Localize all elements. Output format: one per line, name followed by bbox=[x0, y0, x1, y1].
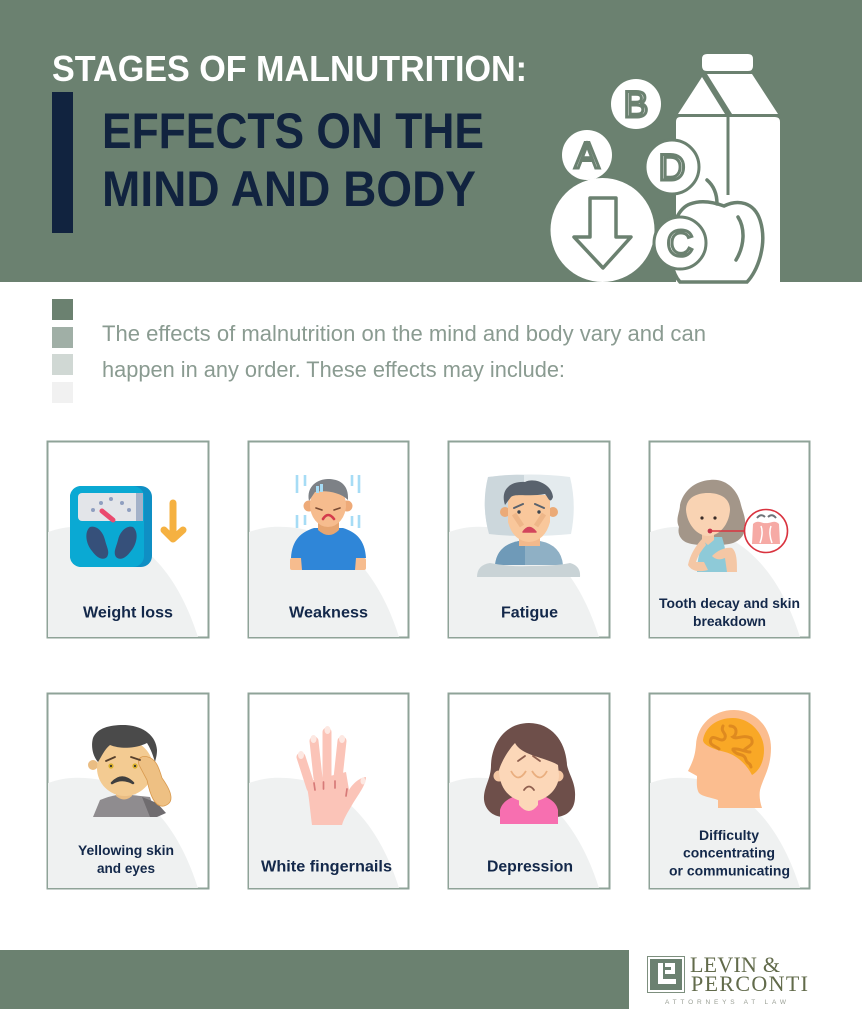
logo: Levin & Perconti bbox=[648, 952, 808, 1006]
icon: scale bbox=[70, 486, 152, 567]
vitamin B bbox=[611, 79, 661, 129]
label: concentrating bbox=[683, 844, 775, 860]
icon: head with brain bbox=[688, 710, 771, 808]
logo tagline: ATTORNEYS AT LAW bbox=[665, 999, 787, 1006]
icon: nutrition group with carton, vitamins, apple and down arrow bbox=[550, 54, 780, 282]
label: Weight loss bbox=[83, 604, 173, 622]
label: White fingernails bbox=[261, 858, 392, 876]
vitamin A bbox=[562, 130, 612, 180]
panel: fatigue bbox=[448, 442, 610, 638]
panel: weakness bbox=[248, 442, 408, 638]
label: Yellowing skin bbox=[78, 842, 174, 858]
icon: sad woman bbox=[484, 723, 575, 824]
heading: MIND AND BODY bbox=[102, 161, 476, 217]
icon: hand bbox=[298, 726, 366, 825]
heading: EFFECTS ON THE bbox=[102, 103, 484, 159]
header banner bbox=[0, 0, 862, 282]
heading bbox=[102, 103, 484, 217]
vitamin D: D bbox=[659, 147, 685, 188]
intro text: happen in any order. These effects may include: bbox=[102, 357, 565, 382]
footer bar bbox=[0, 950, 629, 1009]
vitamin C bbox=[654, 217, 706, 269]
vitamin C: C bbox=[667, 223, 693, 264]
icon: man with yellow eyes bbox=[88, 725, 171, 817]
intro text: The effects of malnutrition on the mind and body vary and can bbox=[102, 321, 706, 346]
logo wordmark: LEVIN & bbox=[690, 952, 780, 977]
label bbox=[669, 827, 790, 878]
icon: down arrow bbox=[164, 503, 183, 539]
icon: woman with tooth callout bbox=[677, 480, 788, 572]
logo wordmark bbox=[690, 952, 808, 996]
icon: down arrow in circle bbox=[550, 178, 654, 282]
panel: white fingernails bbox=[248, 694, 408, 888]
color swatches bbox=[52, 299, 73, 403]
icon: weak person bbox=[290, 475, 366, 570]
label: and eyes bbox=[97, 860, 155, 876]
panel: tooth decay and skin breakdown bbox=[650, 442, 810, 638]
title: STAGES OF MALNUTRITION: bbox=[52, 48, 527, 89]
label: Weakness bbox=[289, 604, 368, 622]
intro text bbox=[102, 321, 706, 382]
label bbox=[78, 842, 174, 876]
panel: weight loss bbox=[48, 442, 208, 638]
icon: tired person in bed bbox=[477, 474, 580, 577]
heading accent bar bbox=[52, 92, 73, 233]
label: Tooth decay and skin bbox=[659, 595, 800, 611]
label: breakdown bbox=[693, 613, 766, 629]
label: Fatigue bbox=[501, 604, 558, 622]
label: Depression bbox=[487, 858, 573, 876]
logo mark bbox=[648, 956, 684, 992]
panel: depression bbox=[448, 694, 610, 888]
logo wordmark: PERCONTI bbox=[691, 971, 808, 996]
vitamin A: A bbox=[575, 135, 600, 176]
label: or communicating bbox=[669, 862, 790, 878]
vitamin D bbox=[645, 140, 699, 194]
icon: apple bbox=[670, 180, 763, 282]
panel: yellowing skin and eyes bbox=[48, 694, 208, 888]
label: Difficulty bbox=[699, 827, 759, 843]
vitamin B: B bbox=[624, 84, 648, 125]
label bbox=[659, 595, 800, 629]
panel: difficulty concentrating or communicating bbox=[650, 694, 810, 888]
